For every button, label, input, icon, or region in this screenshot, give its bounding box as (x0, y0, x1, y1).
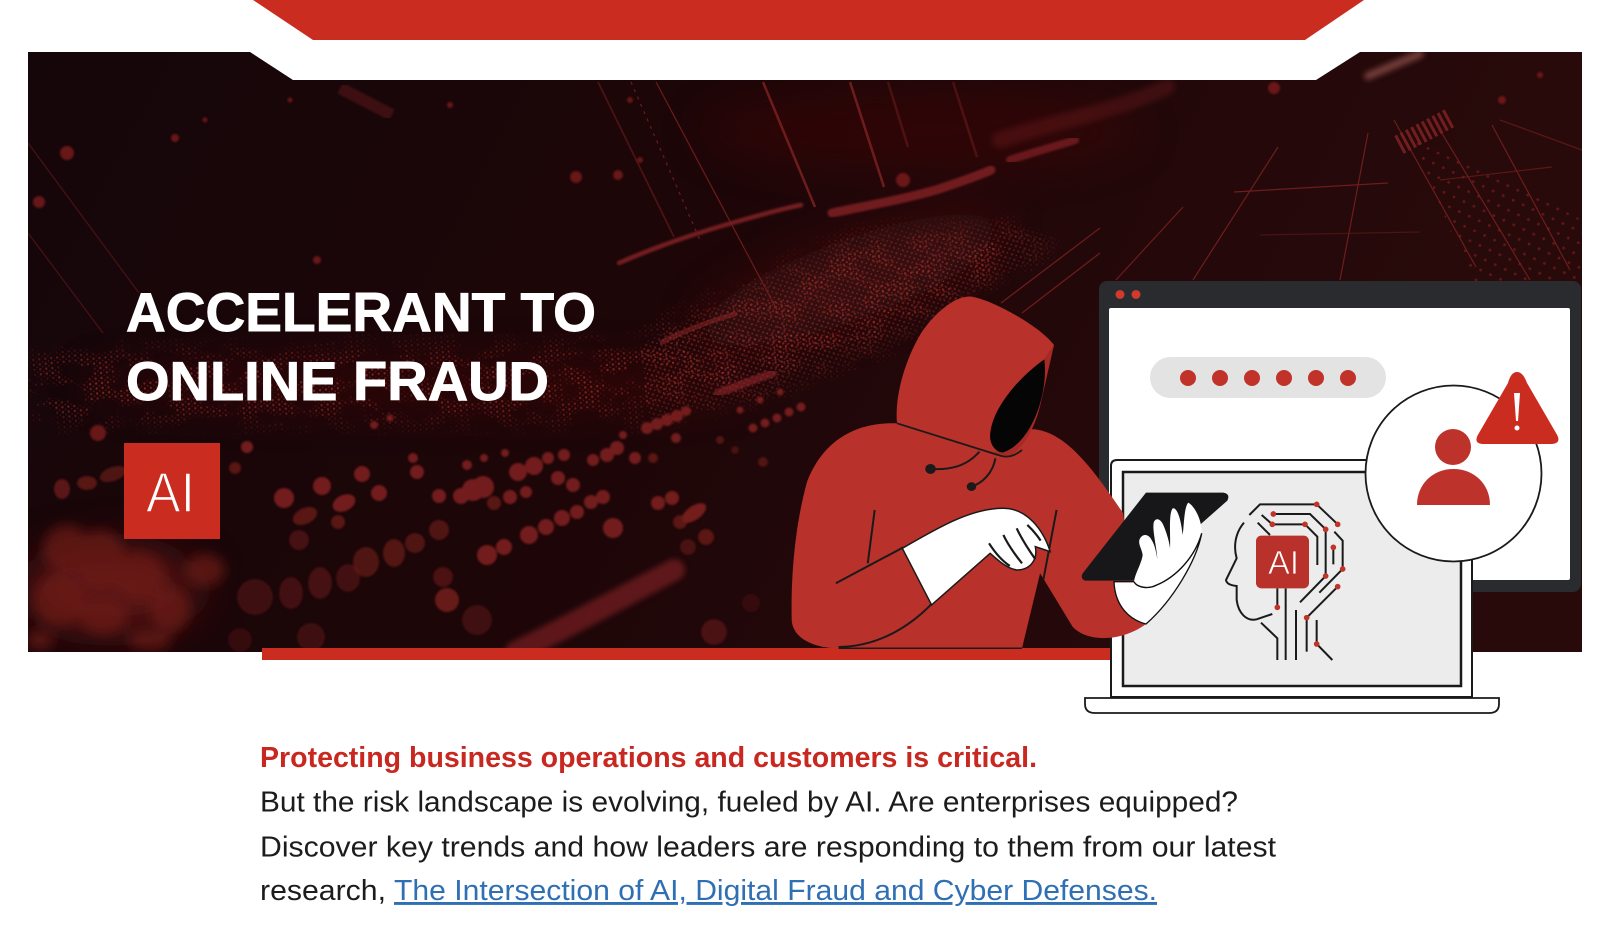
lower left mottled haze (26, 525, 225, 650)
title: ONLINE FRAUD (126, 350, 549, 412)
hood (897, 297, 1054, 457)
hoodie body (792, 423, 1147, 648)
bokeh lights (54, 388, 806, 652)
red lead sentence: Protecting business operations and customers is critical. (260, 742, 1037, 774)
top red banner (253, 0, 1364, 40)
user icon (1417, 429, 1490, 505)
glow haze (20, 90, 1140, 632)
password field (1150, 357, 1386, 398)
report link: The Intersection of AI, Digital Fraud and Cyber Defenses. (394, 875, 1157, 907)
warning triangle (1476, 372, 1558, 444)
dotted light bands (28, 205, 1090, 435)
user alert circle (1366, 372, 1558, 562)
body line 3: research, (260, 875, 386, 907)
left sleeve and hand (902, 508, 1050, 605)
thin perspective lines (28, 82, 1582, 333)
intro text block (260, 742, 1276, 907)
body line 2: Discover key trends and how leaders are responding to them from our latest (260, 832, 1276, 864)
light streaks (340, 54, 1450, 652)
AI badge (124, 443, 220, 539)
drawstrings (926, 452, 995, 490)
laptop illustration (1085, 460, 1499, 713)
cuff (1114, 533, 1202, 624)
AI chip label: AI (1268, 544, 1299, 581)
AI brain head circuit icon (1226, 501, 1345, 660)
browser window illustration (1099, 281, 1581, 592)
hooded hacker figure (792, 297, 1147, 648)
body line 1: But the risk landscape is evolving, fueled by AI. Are enterprises equipped? (260, 786, 1238, 818)
scattered lights upper (33, 72, 1543, 441)
title: ACCELERANT TO (126, 281, 596, 343)
title (126, 281, 596, 412)
red baseline bar (262, 648, 1142, 660)
tablet (1082, 493, 1228, 581)
AI badge: AI (146, 461, 195, 525)
hero background panel (20, 52, 1582, 652)
fingers (1134, 503, 1202, 587)
tablet and right hand (1082, 493, 1228, 624)
